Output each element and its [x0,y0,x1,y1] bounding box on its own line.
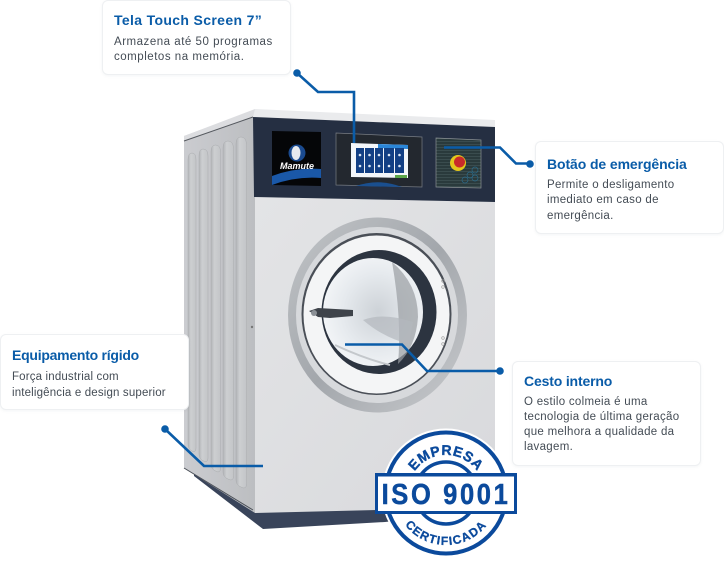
touch screen bezel [336,133,422,187]
machine front [251,197,495,513]
machine base [194,460,495,529]
machine side panel [184,109,255,513]
heading: Cesto interno: Cesto interno [524,373,612,389]
text: basket description: O estilo colmeia é uma [524,396,648,408]
card: Cesto interno [512,361,701,466]
badge text: certificada: CERTIFICADA [406,521,486,546]
text: basket description: tecnologia de última geração [524,411,679,423]
connector: inner basket [345,344,504,375]
text: equipment description [12,370,166,398]
card: Botão de emergência [535,141,724,234]
door handle [309,308,353,318]
ISO 9001 badge [375,428,517,556]
door [288,218,467,412]
control panel [253,117,495,202]
machine top edge [253,109,495,127]
text: emergency description: emergência. [547,210,614,222]
text: basket description [524,396,679,453]
heading: Tela Touch Screen: Tela Touch Screen 7” [114,12,262,28]
text: emergency description: Permite o desligamento [547,179,674,191]
text: basket description: lavagem. [524,441,573,453]
card: Equipamento rígido [0,334,189,410]
card: Tela Touch Screen [102,0,291,75]
text: touch screen description [114,36,273,63]
heading: Equipamento rígido: Equipamento rígido [12,347,139,363]
text: basket description: que melhora a qualidade da [524,426,674,438]
connector: touch screen [293,69,354,143]
emergency button panel [436,138,481,188]
badge band: ISO 9001 [382,477,510,510]
text: equipment description: inteligência e design superior [12,386,166,398]
connector: rigid equipment [161,425,263,466]
heading: Botão de emergência: Botão de emergência [547,156,687,172]
logo panel: Mamute [280,161,314,171]
text: emergency description [547,179,674,222]
text: touch screen description: Armazena até 50 programas [114,36,273,48]
badge text: empresa: EMPRESA [408,445,482,471]
text: touch screen description: completos na memória. [114,51,244,63]
text: emergency description: imediato em caso de [547,194,659,206]
logo panel [272,131,321,186]
connector: emergency button [444,148,534,168]
text: equipment description: Força industrial com [12,370,119,382]
